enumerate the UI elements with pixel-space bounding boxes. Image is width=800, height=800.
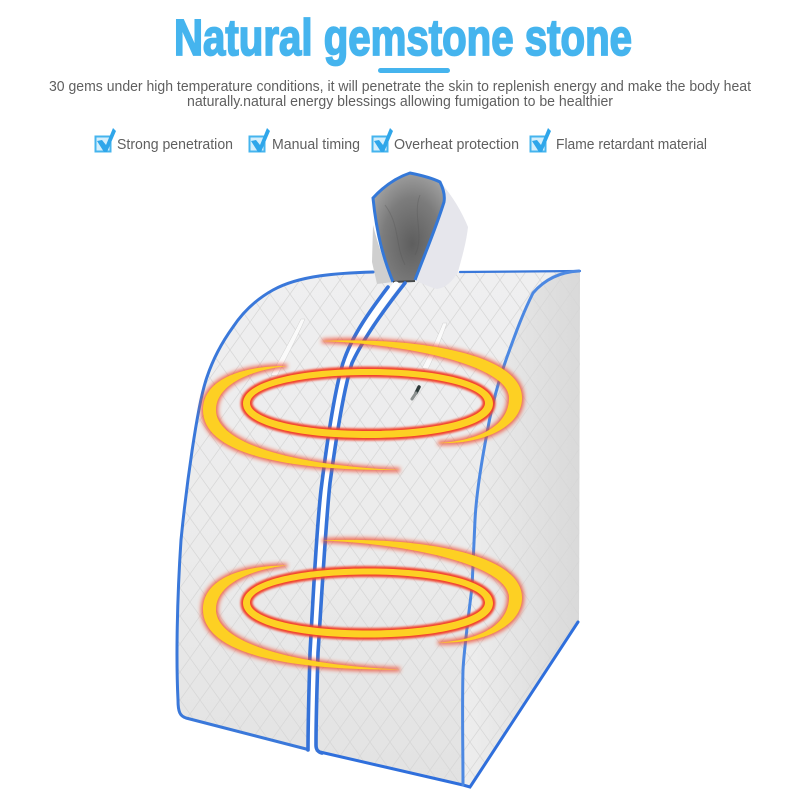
heat swirls: upper [203, 340, 522, 470]
tent body fabric [177, 271, 580, 787]
feature list [96, 128, 707, 153]
description text: naturally.natural energy blessings allowing fumigation to be healthier [187, 93, 613, 110]
heat swirls: lower [203, 540, 522, 670]
window flap left [271, 319, 305, 376]
feature: manual timing [250, 128, 360, 153]
feature: strong penetration: Strong penetration [117, 136, 233, 153]
description text: 30 gems under high temperature conditions, it will penetrate the skin to replenish energy and make the body heat [49, 78, 752, 95]
feature: overheat protection: Overheat protection [394, 136, 519, 153]
sauna tent [177, 173, 580, 787]
window flap right [422, 323, 447, 369]
feature: overheat protection [372, 128, 519, 153]
feature: manual timing: Manual timing [272, 136, 360, 153]
description text [49, 78, 752, 110]
blue piping [177, 271, 580, 787]
title underline [378, 68, 450, 73]
hood [372, 173, 468, 289]
feature: flame retardant material [530, 128, 707, 153]
zipper pull [412, 387, 419, 399]
feature: flame retardant material: Flame retardant material [556, 136, 707, 153]
feature: strong penetration [96, 128, 233, 153]
center zipper [308, 283, 405, 753]
title: Natural gemstone stone [174, 9, 632, 66]
